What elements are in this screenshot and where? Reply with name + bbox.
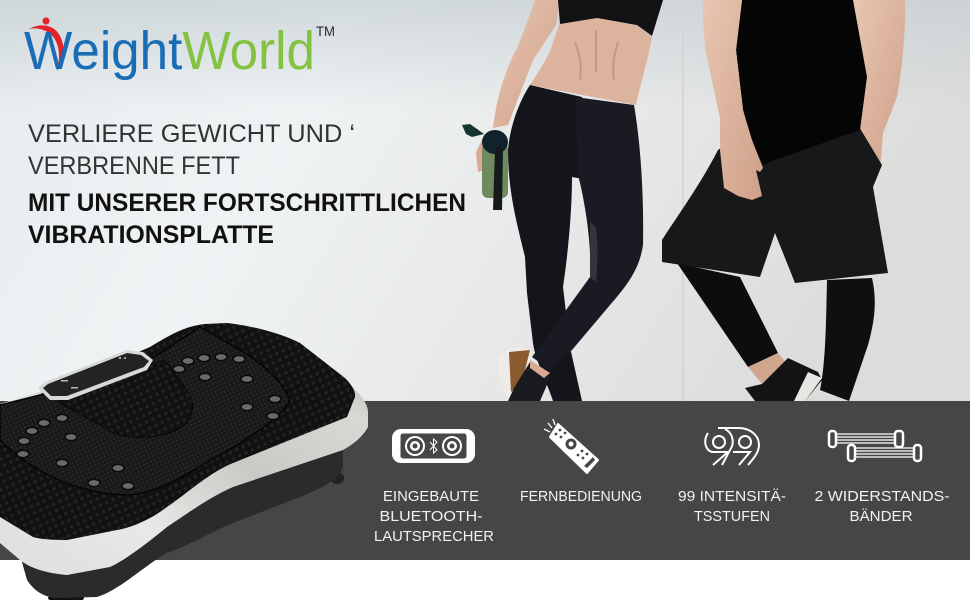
feature: bluetooth speakers <box>374 429 494 545</box>
vibration plate product <box>0 323 368 600</box>
plate control console <box>38 350 153 400</box>
plate massage studs <box>17 353 281 490</box>
plate inner mat <box>0 327 290 495</box>
icon: 99 <box>705 428 759 465</box>
label: bluetooth speakers: LAUTSPRECHER <box>374 528 494 545</box>
headline line 1: VERLIERE GEWICHT UND ‘ <box>28 120 355 148</box>
plate foot left <box>48 593 84 600</box>
plate centre pad <box>58 360 193 438</box>
woman front leg <box>532 97 643 370</box>
label: 99 intensity levels: 99 INTENSITÄ- <box>678 488 786 505</box>
icon: bands <box>829 431 921 461</box>
icon: remote <box>544 419 598 473</box>
logo wordmark: WeightWorld <box>24 21 315 81</box>
label: remote control: FERNBEDIENUNG <box>520 488 642 505</box>
photo: woman with bottle <box>462 0 663 401</box>
man shoe <box>745 358 822 401</box>
label: bluetooth speakers: BLUETOOTH- <box>380 508 482 525</box>
woman abs shading <box>575 30 618 80</box>
man right leg <box>820 278 875 401</box>
photo: man <box>662 0 905 401</box>
woman shoe <box>497 347 550 401</box>
man left leg <box>677 263 778 367</box>
feature: remote control <box>520 419 642 505</box>
headline line 3 bold: MIT UNSERER FORTSCHRITTLICHEN <box>28 189 466 217</box>
logo trademark: TM <box>316 24 335 39</box>
label: bluetooth speakers: EINGEBAUTE <box>383 488 479 505</box>
label: 99 intensity levels <box>678 488 786 525</box>
label: resistance bands: BÄNDER <box>850 508 913 525</box>
man calf <box>748 353 790 384</box>
feature: resistance bands <box>814 431 950 525</box>
headline <box>28 120 466 249</box>
water bottle <box>462 124 508 210</box>
man shirt <box>736 0 867 165</box>
plate base <box>20 445 343 598</box>
woman arm <box>493 0 560 128</box>
plate black surface <box>0 323 355 540</box>
logo: WeightWorld <box>24 17 335 81</box>
label: bluetooth speakers <box>374 488 494 545</box>
plate foot right <box>330 472 344 484</box>
man left arm and hand <box>703 0 763 200</box>
woman leggings mesh panel <box>590 222 598 282</box>
logo figure <box>29 17 64 71</box>
woman sports top <box>558 0 663 36</box>
plate silver rim <box>0 323 368 575</box>
label: 99 intensity levels: TSSTUFEN <box>694 508 770 525</box>
icon: speaker <box>392 429 475 463</box>
grey feature band <box>0 401 970 560</box>
headline line 4 bold: VIBRATIONSPLATTE <box>28 221 274 249</box>
man right arm <box>853 0 905 170</box>
woman back leg <box>508 85 590 401</box>
man shorts <box>662 120 888 283</box>
man shoe sole <box>794 372 822 401</box>
feature: 99 intensity levels <box>678 428 786 525</box>
woman torso <box>530 18 652 105</box>
label: resistance bands: 2 WIDERSTANDS- <box>814 488 950 505</box>
headline line 2: VERBRENNE FETT <box>28 152 240 180</box>
label: resistance bands <box>814 488 950 525</box>
